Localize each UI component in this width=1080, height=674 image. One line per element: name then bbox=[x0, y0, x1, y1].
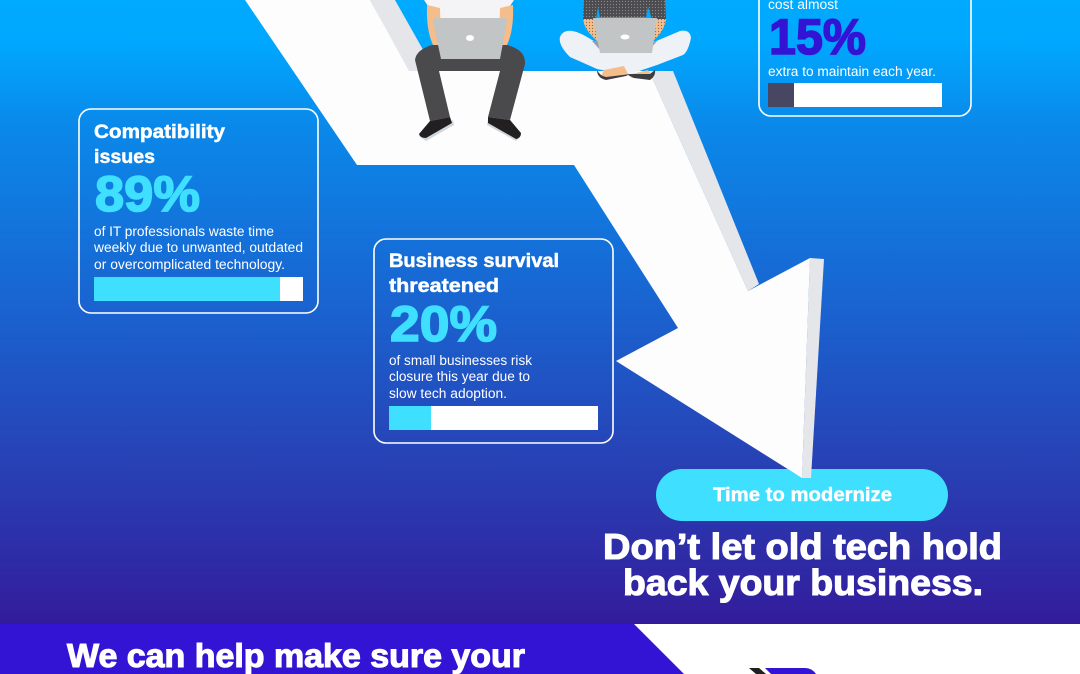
company logo bbox=[749, 668, 816, 674]
description: closure this year due to bbox=[389, 369, 530, 384]
heading: issues bbox=[94, 146, 155, 168]
stat: 89%: 89% bbox=[95, 166, 200, 222]
heading bbox=[94, 121, 225, 168]
arrow tip over pill bbox=[788, 469, 812, 478]
description: or overcomplicated technology. bbox=[94, 257, 285, 272]
headline: back your business. bbox=[623, 562, 983, 603]
heading: Compatibility bbox=[94, 121, 225, 143]
downward arrow bbox=[245, 0, 824, 478]
card: cost to maintain bbox=[759, 0, 971, 116]
bottom banner: We can help make sure your bbox=[67, 637, 525, 674]
bottom white footer bbox=[0, 624, 1080, 674]
description bbox=[389, 353, 532, 401]
headline: Don’t let old tech hold bbox=[603, 526, 1002, 567]
stat: 15%: 15% bbox=[769, 9, 866, 65]
description bbox=[93, 224, 303, 272]
pill: time to modernize: Time to modernize bbox=[713, 485, 892, 506]
description: extra to maintain each year. bbox=[768, 64, 936, 79]
progress bar 20% bbox=[389, 406, 598, 430]
heading bbox=[389, 250, 559, 297]
illustration: man sitting with laptop bbox=[415, 0, 525, 141]
stat: 20%: 20% bbox=[390, 296, 497, 352]
laptop bbox=[593, 18, 657, 53]
illustration: woman cross-legged with laptop bbox=[560, 0, 691, 80]
description: slow tech adoption. bbox=[389, 386, 507, 401]
progress bar 15% bbox=[768, 83, 942, 107]
laptop bbox=[433, 18, 507, 59]
description: weekly due to unwanted, outdated bbox=[93, 240, 303, 255]
heading: Business survival bbox=[389, 250, 559, 272]
pill: time to modernize bbox=[656, 469, 948, 521]
headline bbox=[603, 526, 1002, 603]
card: compatibility issues bbox=[79, 109, 318, 313]
description: of IT professionals waste time bbox=[94, 224, 274, 239]
progress bar 89% bbox=[94, 277, 303, 301]
heading: threatened bbox=[389, 275, 499, 297]
description: of small businesses risk bbox=[389, 353, 532, 368]
bottom banner bbox=[0, 624, 684, 674]
card: business survival threatened bbox=[374, 239, 613, 443]
